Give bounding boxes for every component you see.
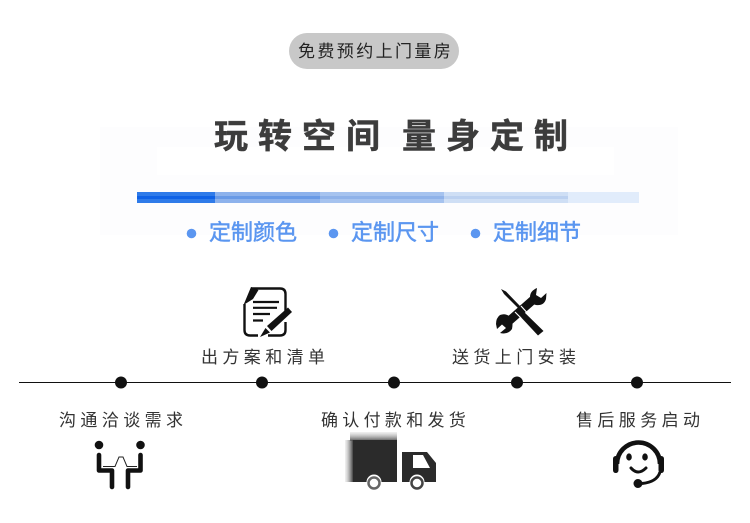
feature: custom colour: 定制颜色 (209, 220, 297, 245)
timeline (19, 376, 731, 388)
icon: crossed tools (496, 288, 546, 336)
feature: custom size: 定制尺寸 (351, 220, 439, 245)
label: discuss needs: 沟通洽谈需求 (59, 411, 187, 430)
icon: headset smiley (613, 443, 664, 488)
label: confirm payment and ship: 确认付款和发货 (321, 411, 470, 430)
label: plan and list: 出方案和清单 (201, 348, 329, 367)
gradient segmented bar (137, 192, 639, 203)
badge: free booking: 免费预约上门量房 (298, 42, 453, 61)
label: after-sales service: 售后服务启动 (576, 411, 704, 430)
title second part: 量身定制 (402, 118, 578, 156)
title: 玩转空间 (214, 118, 390, 156)
icon: document and pen (244, 287, 292, 337)
feature: custom details: 定制细节 (493, 220, 581, 245)
icon: delivery truck (345, 432, 436, 490)
label: delivery and installation: 送货上门安装 (452, 348, 580, 367)
badge: free booking (289, 33, 459, 69)
icon: two people talking (95, 441, 145, 487)
